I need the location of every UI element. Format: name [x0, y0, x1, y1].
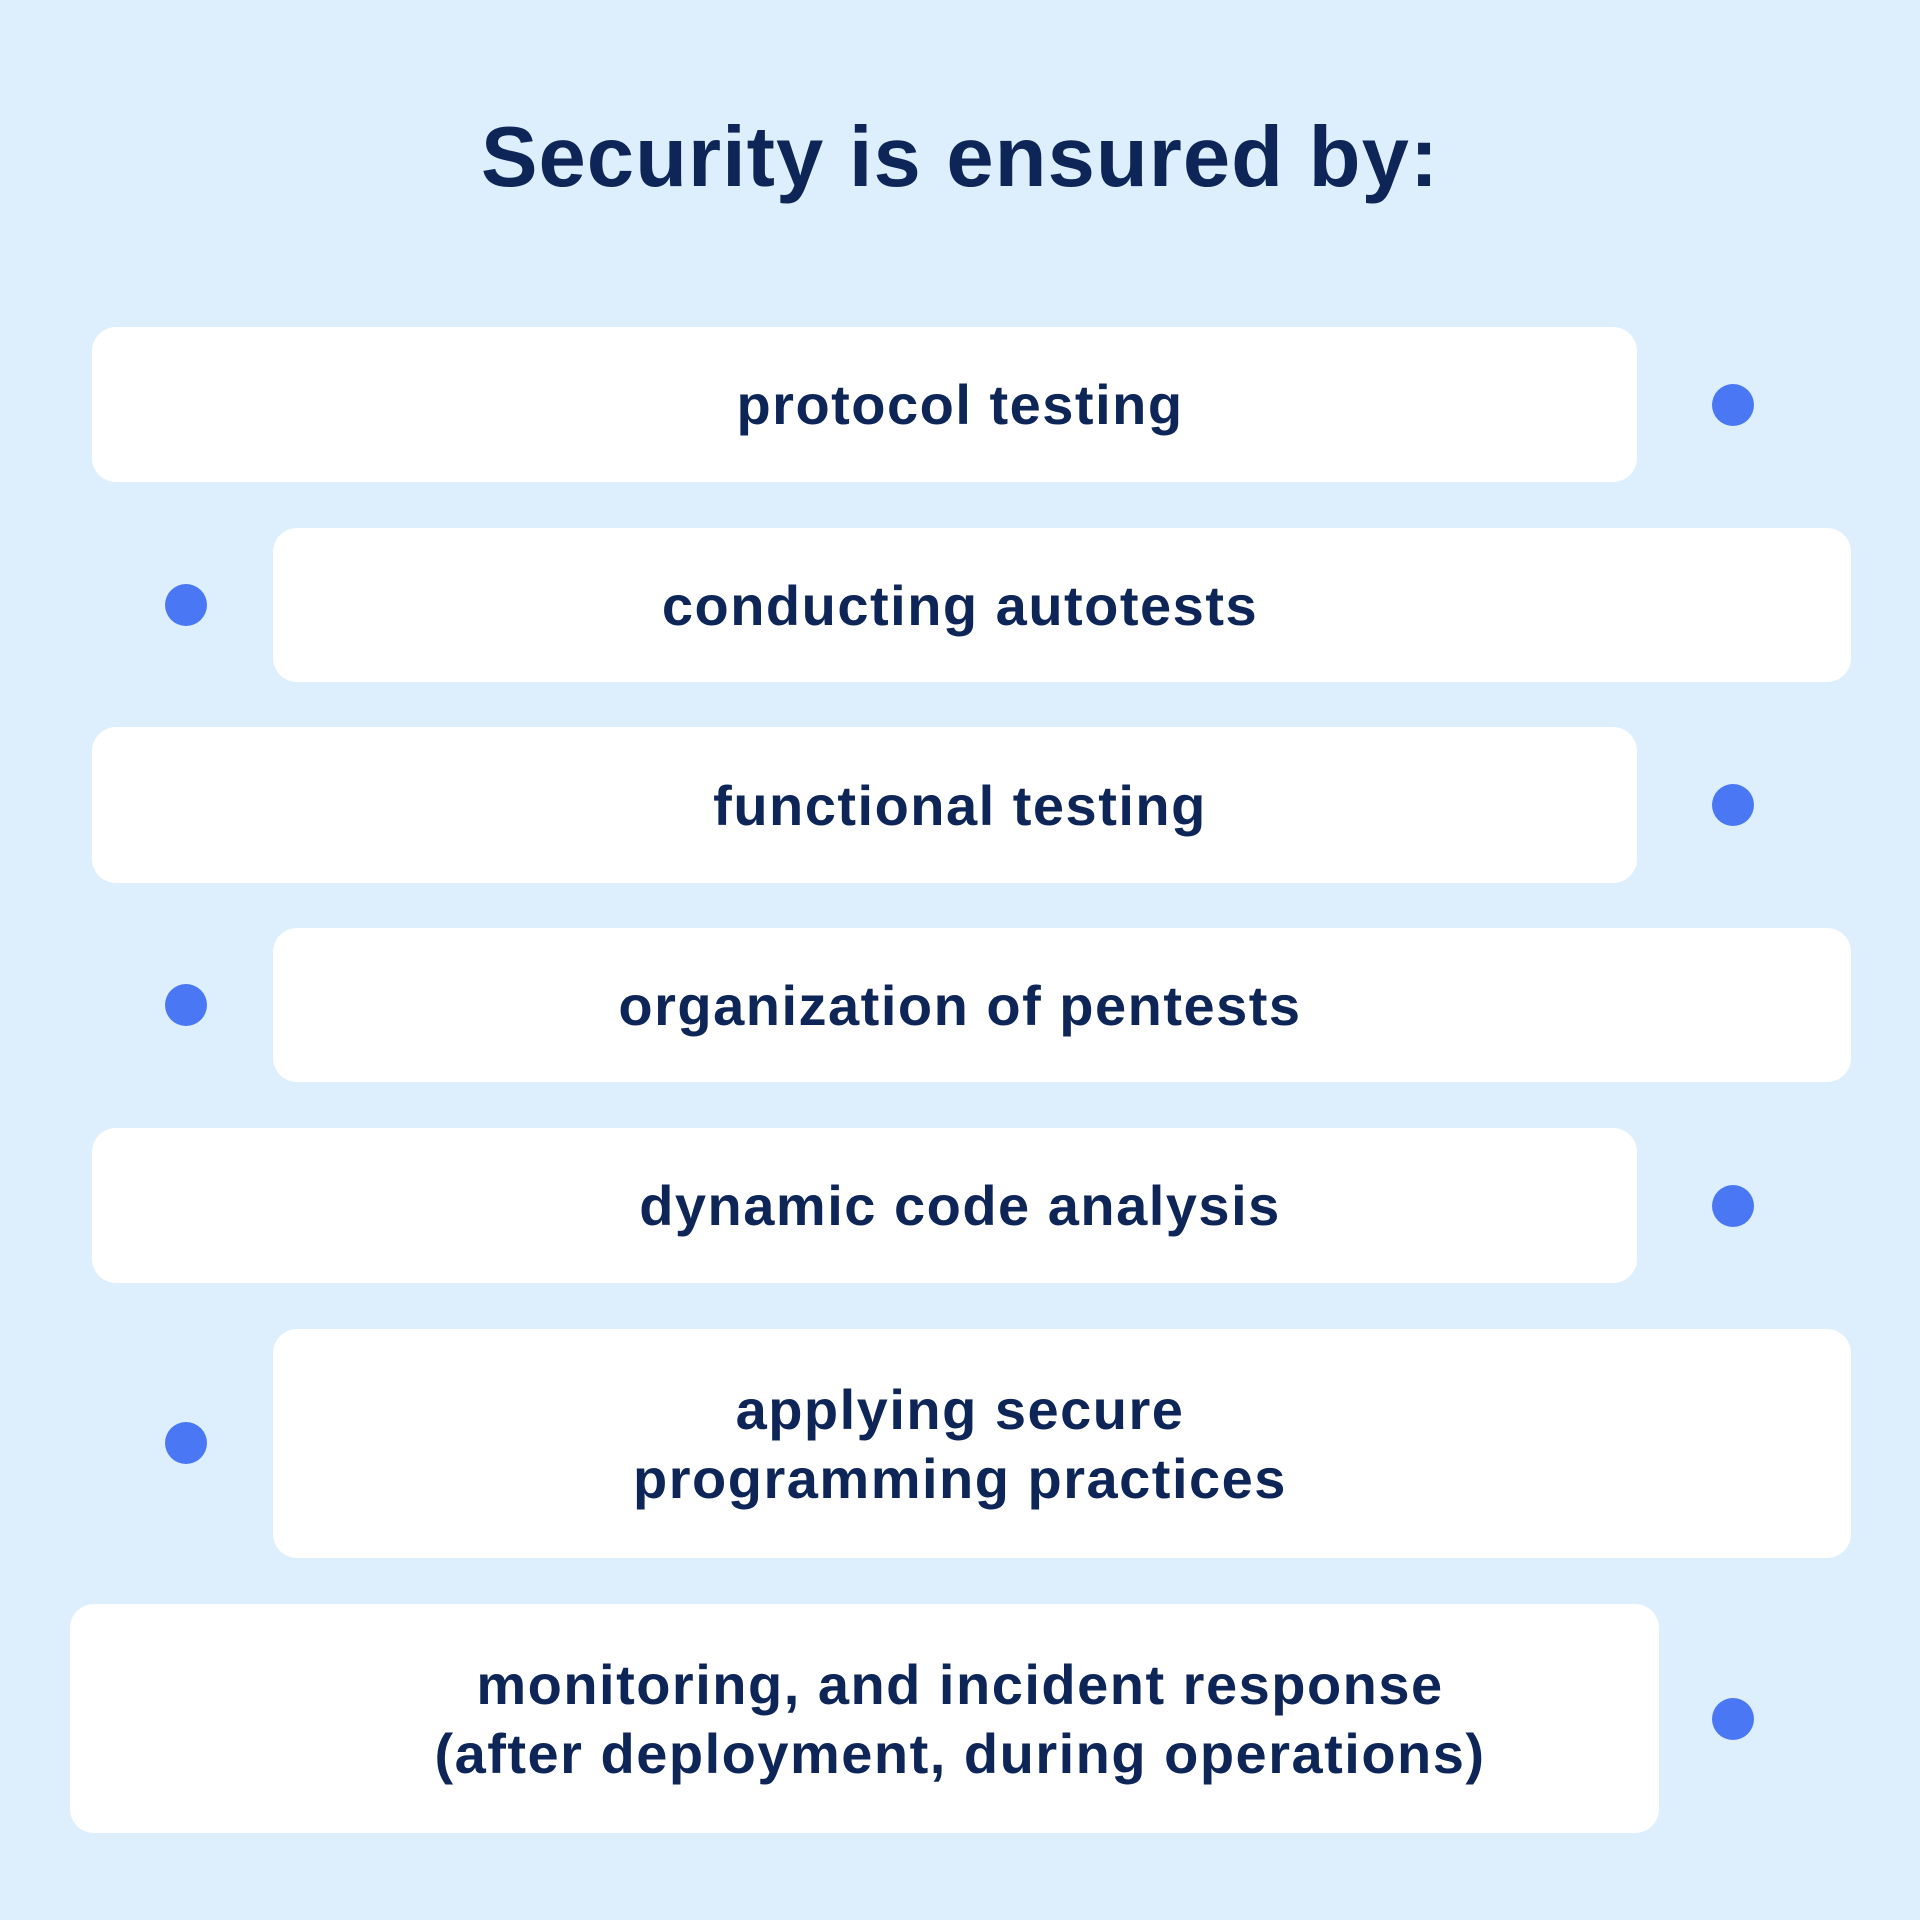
dot 5 [1712, 1185, 1754, 1227]
item: monitoring and incident response [70, 1604, 1659, 1833]
title: Security is ensured by: [481, 110, 1439, 205]
item: conducting autotests [273, 528, 1851, 682]
item: monitoring and incident response: (after deployment, during operations) [434, 1722, 1486, 1784]
item: organization of pentests [273, 928, 1851, 1082]
item: protocol testing [92, 327, 1637, 482]
dot 6 [165, 1422, 207, 1464]
item: secure programming: programming practices [633, 1446, 1287, 1510]
item: organization of pentests: organization of pentests [618, 974, 1302, 1036]
item: protocol testing: protocol testing [736, 373, 1184, 436]
item: conducting autotests: conducting autotests [662, 574, 1258, 636]
dot 7 [1712, 1698, 1754, 1740]
item: monitoring and incident response: monitoring, and incident response [476, 1652, 1444, 1716]
item: dynamic code analysis [92, 1128, 1637, 1283]
item: functional testing [92, 727, 1637, 883]
dot 4 [165, 984, 207, 1026]
dot 1 [1712, 384, 1754, 426]
item: secure programming: applying secure [736, 1378, 1184, 1440]
dot 2 [165, 584, 207, 626]
item: dynamic code analysis: dynamic code analysis [639, 1174, 1281, 1237]
item: secure programming [273, 1329, 1851, 1558]
dot 3 [1712, 784, 1754, 826]
item: functional testing: functional testing [713, 774, 1207, 836]
